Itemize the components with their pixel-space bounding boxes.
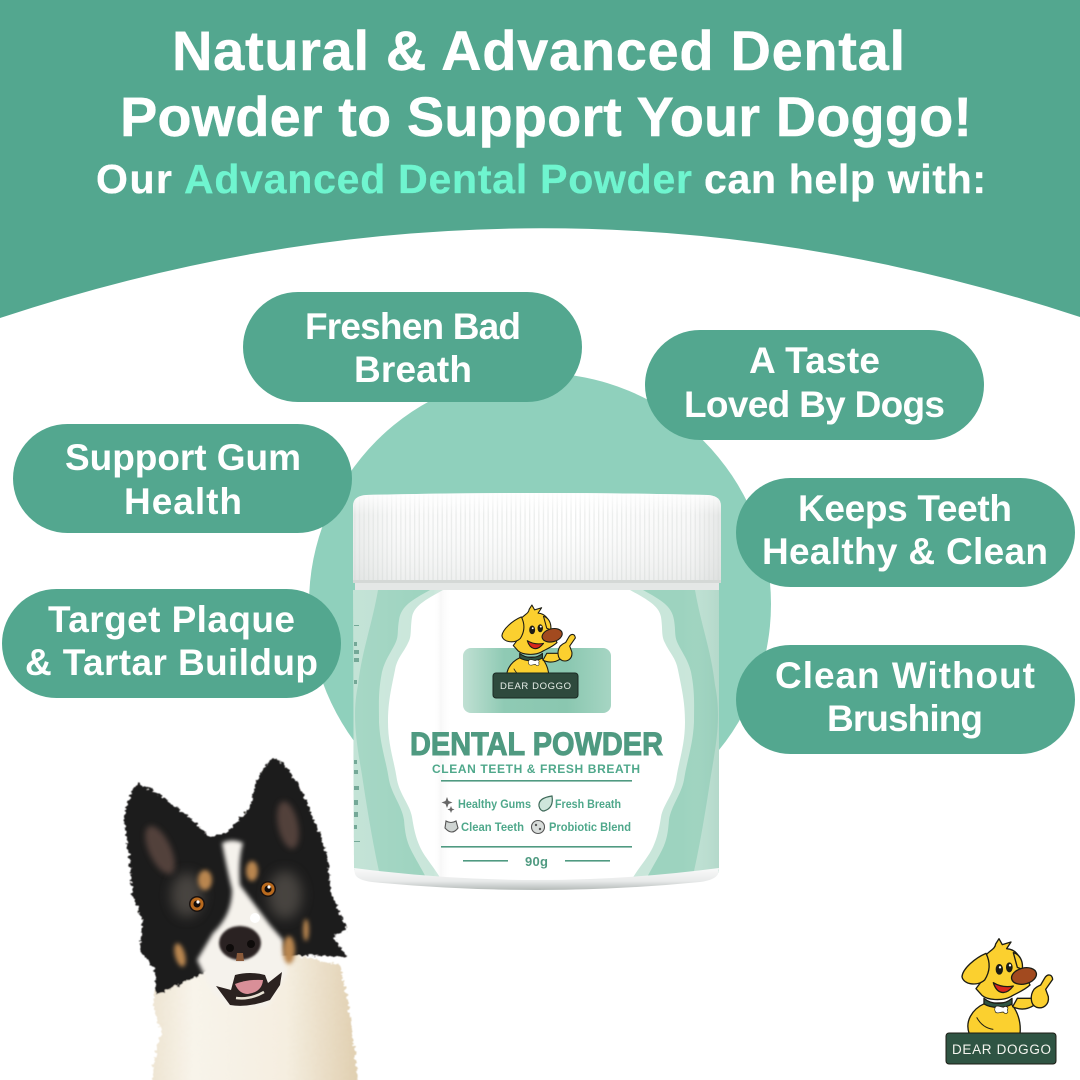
brand logo bbox=[946, 939, 1056, 1064]
dog photo bbox=[125, 757, 358, 1080]
pill: clean without brushing: Brushing bbox=[827, 698, 983, 739]
subtitle bbox=[96, 156, 986, 202]
dog nose bbox=[219, 913, 261, 961]
label logo plaque: DEAR DOGGO bbox=[500, 681, 571, 692]
dog white blaze and muzzle bbox=[197, 840, 287, 1007]
pill: a taste loved by dogs: Loved By Dogs bbox=[684, 384, 945, 425]
product name: DENTAL POWDER bbox=[410, 726, 663, 762]
pill: clean without brushing bbox=[736, 645, 1075, 754]
product tagline: CLEAN TEETH & FRESH BREATH bbox=[432, 762, 640, 776]
benefit: fresh breath: Fresh Breath bbox=[555, 799, 621, 811]
pill: a taste loved by dogs bbox=[645, 330, 984, 440]
title: Natural & Advanced Dental bbox=[172, 19, 905, 82]
benefit: clean teeth: Clean Teeth bbox=[461, 822, 524, 834]
pill: target plaque and tartar buildup bbox=[2, 589, 341, 698]
dog face shading bbox=[171, 871, 302, 919]
dog ear inner bbox=[139, 799, 303, 878]
title bbox=[120, 19, 972, 148]
pill: target plaque and tartar buildup: Target Plaque bbox=[48, 599, 295, 640]
jar cap bbox=[353, 493, 721, 590]
label logo plaque bbox=[493, 673, 578, 698]
label logo panel bbox=[463, 648, 611, 713]
header banner bbox=[0, 0, 1080, 318]
subtitle: Advanced Dental Powder bbox=[184, 156, 692, 202]
dog mouth bbox=[216, 972, 282, 1006]
backdrop circle bbox=[309, 373, 771, 835]
pill: target plaque and tartar buildup: & Tartar Buildup bbox=[25, 642, 318, 683]
side label small print bbox=[354, 625, 360, 842]
pill: freshen bad breath bbox=[243, 292, 582, 402]
benefit: probiotic blend: Probiotic Blend bbox=[549, 822, 631, 834]
pill: freshen bad breath: Freshen Bad bbox=[305, 306, 521, 347]
subtitle: Our bbox=[96, 156, 172, 202]
label dog mascot bbox=[502, 605, 575, 682]
pill: keeps teeth healthy and clean bbox=[736, 478, 1075, 587]
benefit: healthy gums bbox=[442, 797, 531, 813]
dog eyes bbox=[189, 881, 276, 912]
benefit: fresh breath bbox=[539, 796, 621, 811]
pill: freshen bad breath: Breath bbox=[354, 349, 472, 390]
product jar bbox=[353, 493, 721, 890]
subtitle: can help with: bbox=[704, 156, 986, 202]
pill: keeps teeth healthy and clean: Keeps Teeth bbox=[798, 488, 1012, 529]
pill: support gum health bbox=[13, 424, 352, 533]
title: Powder to Support Your Doggo! bbox=[120, 85, 972, 148]
pill: support gum health: Support Gum bbox=[65, 437, 301, 478]
jar base rim bbox=[354, 868, 719, 890]
pill: support gum health: Health bbox=[124, 481, 242, 522]
net weight: 90g bbox=[525, 854, 548, 869]
mascot bbox=[962, 939, 1053, 1034]
logo plaque: DEAR DOGGO bbox=[952, 1042, 1051, 1057]
pill: a taste loved by dogs: A Taste bbox=[749, 340, 880, 381]
pill: keeps teeth healthy and clean: Healthy & Clean bbox=[762, 531, 1048, 572]
dog tan markings bbox=[172, 861, 309, 968]
pill: clean without brushing: Clean Without bbox=[775, 655, 1035, 696]
jar body label bbox=[353, 590, 720, 890]
benefit: healthy gums: Healthy Gums bbox=[458, 799, 531, 811]
